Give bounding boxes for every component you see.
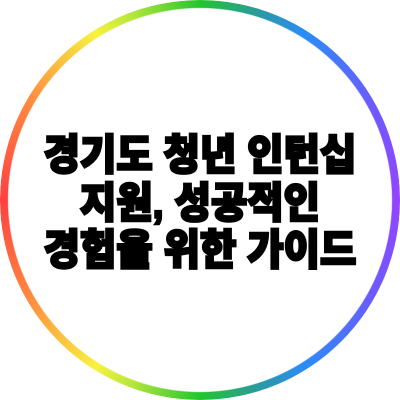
title: 경기도 청년 인턴십 [44, 132, 356, 179]
title: 경험을 위한 가이드 [44, 227, 356, 274]
title [44, 132, 356, 274]
title: 지원, 성공적인 [80, 180, 320, 227]
